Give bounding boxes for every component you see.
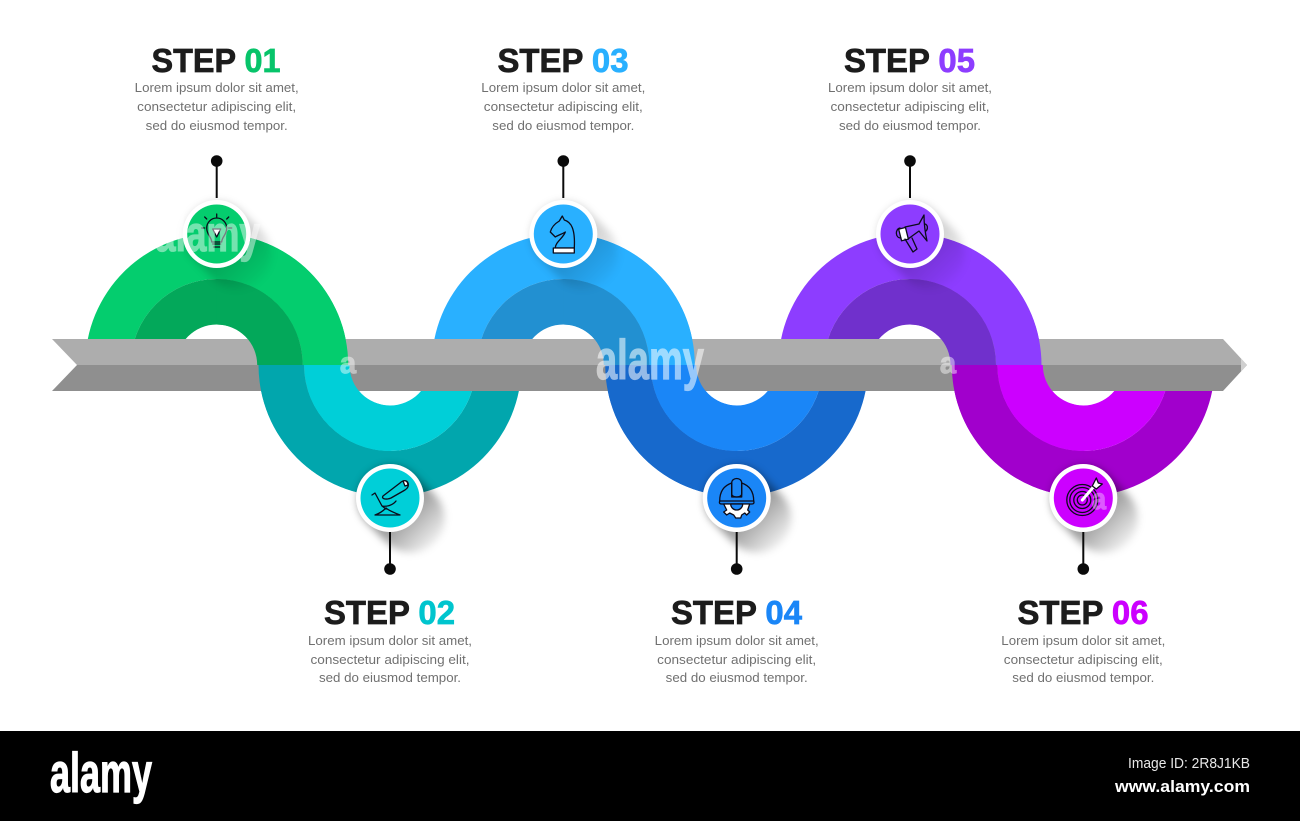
watermarks: a xyxy=(340,347,356,380)
step 1 text: sed do eiusmod tempor. xyxy=(146,118,288,133)
step 5 text xyxy=(828,42,992,133)
arch: step 3 xyxy=(432,234,695,365)
step 5 text: STEP 05 xyxy=(844,42,975,79)
step 3 text: consectetur adipiscing elit, xyxy=(484,99,643,114)
step 6 text xyxy=(1001,594,1165,685)
step 6 text: consectetur adipiscing elit, xyxy=(1004,652,1163,667)
ribbon overlap: step 3 to 4 xyxy=(563,234,737,496)
footer logo: alamy xyxy=(50,741,152,804)
step 5 text: sed do eiusmod tempor. xyxy=(839,118,981,133)
watermarks xyxy=(155,206,1106,516)
step 1 text xyxy=(135,42,299,133)
step 2 text xyxy=(308,594,472,685)
icon: light bulb xyxy=(202,214,232,247)
step 6 badge with pin xyxy=(1049,464,1117,575)
step 2 text: STEP 02 xyxy=(324,594,455,631)
step 2 badge with pin xyxy=(356,464,424,575)
step 5 text: consectetur adipiscing elit, xyxy=(830,99,990,114)
step 6 text: Lorem ipsum dolor sit amet, xyxy=(1001,633,1165,648)
step 5 badge with pin xyxy=(876,155,944,268)
step 2 text: Lorem ipsum dolor sit amet, xyxy=(308,633,472,648)
icon: target and dart xyxy=(1067,478,1102,516)
step 1 text: Lorem ipsum dolor sit amet, xyxy=(135,80,299,95)
badge shadows xyxy=(184,201,1138,553)
watermarks: a xyxy=(940,347,956,380)
step 1 text: STEP 01 xyxy=(152,42,280,79)
step 4 badge with pin xyxy=(703,464,771,575)
step 3 text: STEP 03 xyxy=(498,42,628,79)
footer bar xyxy=(0,731,1300,821)
arch: step 2 xyxy=(258,365,522,496)
step 2 text: sed do eiusmod tempor. xyxy=(319,670,461,685)
step 4 text: STEP 04 xyxy=(671,594,803,631)
ribbon overlap: step 5 to 6 xyxy=(910,234,1083,496)
arch: step 4 xyxy=(605,365,868,496)
step 3 text: Lorem ipsum dolor sit amet, xyxy=(481,80,645,95)
step 6 text: STEP 06 xyxy=(1018,594,1148,631)
step 4 text xyxy=(655,594,819,685)
icon: helmet and gear xyxy=(719,478,754,518)
step 2 text: consectetur adipiscing elit, xyxy=(310,652,470,667)
watermarks: alamy xyxy=(596,328,704,391)
arch: step 1 xyxy=(85,233,348,365)
icon: chess knight xyxy=(550,216,574,253)
footer image id: Image ID: 2R8J1KB xyxy=(1128,755,1250,772)
step 3 text: sed do eiusmod tempor. xyxy=(492,118,634,133)
footer website: www.alamy.com xyxy=(1114,777,1250,796)
icon: microscope xyxy=(372,481,408,515)
arch: step 6 xyxy=(952,365,1215,497)
step 3 text xyxy=(481,42,645,133)
step 1 text: consectetur adipiscing elit, xyxy=(137,99,296,114)
icon: megaphone xyxy=(896,215,927,252)
step 1 badge with pin xyxy=(183,155,251,268)
arch: step 5 xyxy=(778,233,1042,365)
step 5 text: Lorem ipsum dolor sit amet, xyxy=(828,80,992,95)
step 6 text: sed do eiusmod tempor. xyxy=(1012,670,1154,685)
step 3 badge with pin xyxy=(529,155,597,268)
ribbon overlap: step 1 to 2 xyxy=(217,234,390,496)
step 4 text: consectetur adipiscing elit, xyxy=(657,652,816,667)
watermarks: a xyxy=(1092,483,1106,516)
step 4 text: Lorem ipsum dolor sit amet, xyxy=(655,633,819,648)
grey arrow bar xyxy=(52,339,1247,391)
step 4 text: sed do eiusmod tempor. xyxy=(666,670,808,685)
watermarks: alamy xyxy=(155,206,260,262)
